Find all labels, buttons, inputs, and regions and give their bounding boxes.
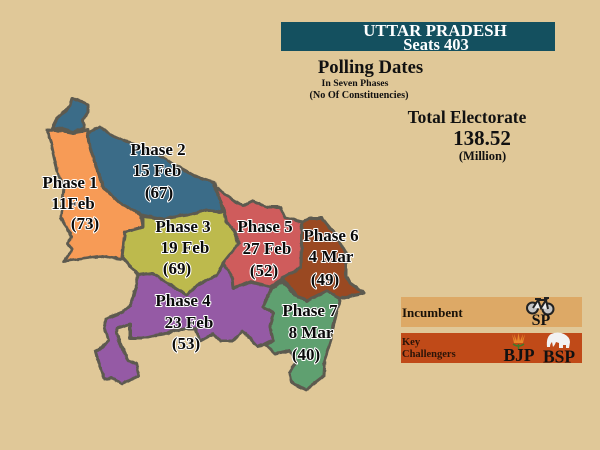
label: phase 6: (49)	[311, 270, 339, 289]
label: phase 2: (67)	[145, 183, 173, 202]
label: phase 6: Phase 6	[303, 226, 359, 245]
icon: elephant	[547, 332, 570, 348]
label: phase 7: (40)	[292, 345, 320, 364]
label: phase 5: 27 Feb	[243, 239, 291, 258]
legend: incumbent	[401, 297, 582, 329]
total electorate: 138.52	[453, 126, 511, 150]
label: phase 7: Phase 7	[282, 301, 338, 320]
polling dates heading: (No Of Constituencies)	[309, 90, 409, 101]
label: phase 1: Phase 1	[42, 173, 98, 192]
title banner: Seats 403	[403, 35, 469, 54]
total electorate	[408, 107, 527, 163]
region: phase 5	[214, 186, 302, 288]
map labels	[42, 140, 359, 364]
label: phase 3: Phase 3	[155, 217, 211, 236]
legend: key challengers: Challengers	[402, 349, 456, 360]
label: phase 3: (69)	[163, 259, 191, 278]
title banner	[281, 21, 555, 54]
legend: key challengers: BSP	[543, 346, 575, 366]
region: phase 6	[282, 218, 364, 301]
label: phase 1: (73)	[71, 214, 99, 233]
label: phase 6: 4 Mar	[309, 247, 354, 266]
legend: key challengers: BJP	[503, 345, 535, 365]
label: phase 5: (52)	[250, 261, 278, 280]
region: phase 2	[88, 127, 224, 219]
icon: bicycle	[527, 298, 554, 314]
map of Uttar Pradesh	[47, 98, 364, 390]
region: phase 2 northwest part	[52, 98, 88, 132]
region: phase 7	[263, 282, 340, 390]
total electorate: Total Electorate	[408, 107, 527, 127]
label: phase 3	[155, 217, 211, 278]
label: phase 4	[155, 291, 213, 353]
label: phase 7: 8 Mar	[289, 323, 334, 342]
label: phase 2: 15 Feb	[133, 161, 181, 180]
polling dates heading	[309, 57, 423, 101]
label: phase 6	[303, 226, 359, 289]
label: phase 5	[237, 217, 293, 280]
label: phase 4: 23 Feb	[165, 313, 213, 332]
region: phase 3	[122, 210, 239, 295]
polling dates heading: In Seven Phases	[322, 78, 389, 89]
label: phase 1	[42, 173, 99, 233]
label: phase 4: Phase 4	[155, 291, 211, 310]
icon: lotus	[512, 333, 525, 349]
region: phase 4	[96, 263, 273, 384]
label: phase 4: (53)	[172, 334, 200, 353]
label: phase 3: 19 Feb	[161, 238, 209, 257]
region: phase 1	[47, 130, 143, 261]
total electorate: (Million)	[459, 149, 506, 163]
label: phase 1: 11Feb	[51, 194, 95, 213]
title banner: UTTAR PRADESH	[363, 21, 507, 40]
legend: incumbent: Incumbent	[402, 305, 463, 320]
legend: key challengers: Key	[402, 337, 421, 348]
legend: incumbent: SP	[532, 312, 551, 329]
polling dates heading: Polling Dates	[318, 57, 423, 78]
label: phase 5: Phase 5	[237, 217, 293, 236]
label: phase 2	[130, 140, 186, 202]
label: phase 7	[282, 301, 338, 364]
legend: key challengers	[401, 332, 582, 366]
label: phase 2: Phase 2	[130, 140, 186, 159]
